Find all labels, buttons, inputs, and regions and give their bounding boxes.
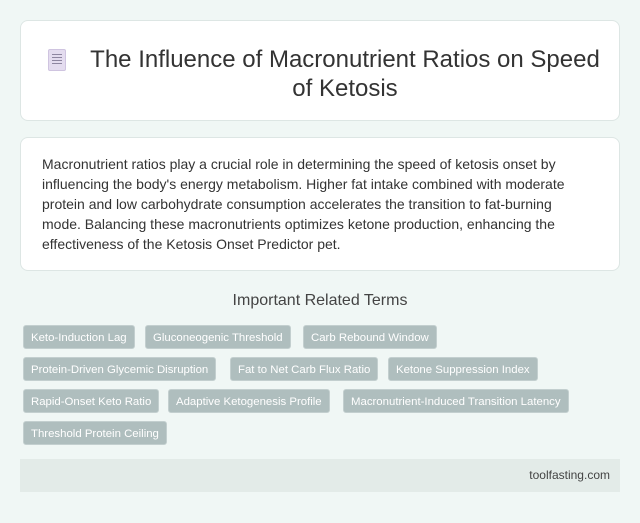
description text: Macronutrient ratios play a crucial role in determining the speed of ketosis onset by influencing the body's energy metabolism. Higher fat intake combined with moderate protein and low carbohydrate consumption accelerates the transition to fat-burning mode. Balancing these macronutrients optimizes ketone production, enhancing the effectiveness of the Ketosis Onset Predictor pet. — [42, 156, 565, 252]
tags: Fat to Net Carb Flux Ratio — [238, 364, 370, 376]
tags: Rapid-Onset Keto Ratio — [31, 396, 151, 408]
footer: toolfasting.com — [529, 468, 610, 482]
footer — [20, 459, 620, 492]
tags: Protein-Driven Glycemic Disruption — [31, 364, 208, 376]
description card — [20, 137, 620, 271]
tags: Adaptive Ketogenesis Profile — [176, 396, 322, 408]
tags: Ketone Suppression Index — [396, 364, 530, 376]
title: The Influence of Macronutrient Ratios on Speed of Ketosis — [90, 46, 600, 102]
section heading: Important Related Terms — [233, 292, 407, 309]
tags: Keto-Induction Lag — [31, 332, 127, 344]
tags: Gluconeogenic Threshold — [153, 332, 283, 344]
tags: Carb Rebound Window — [311, 332, 429, 344]
icon: document — [48, 49, 66, 71]
header card — [20, 20, 620, 121]
tags: Threshold Protein Ceiling — [31, 428, 159, 440]
tags: Macronutrient-Induced Transition Latency — [351, 396, 561, 408]
